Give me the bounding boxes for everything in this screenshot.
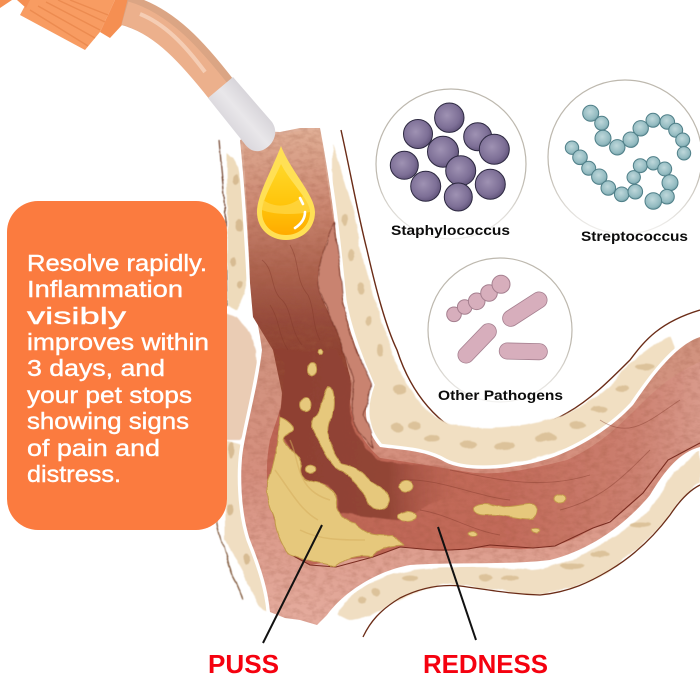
ring [548,80,700,234]
illustration: inflamed ear canal [217,128,700,637]
lower bone layer [338,450,700,637]
callout text: improves within [27,329,209,355]
dropper [0,0,275,151]
tissue dark lumen [274,350,470,520]
callout: puss [208,525,322,679]
dropper: silicone tip [208,77,275,151]
tissue wrinkle lines [262,245,680,535]
callout text: visibly [27,303,127,329]
rods [466,300,539,355]
dropper: cap [0,0,135,50]
panel: streptococcus [548,80,700,244]
pus deposits [267,349,566,567]
ring [428,258,572,402]
pus: main deposit [267,417,403,567]
spheres [390,103,509,211]
pus: droplets [300,398,311,412]
cocci chain [447,275,510,322]
callout: redness [423,527,548,679]
panel: orange callout [7,201,227,530]
tissue white halo [240,128,700,625]
callout text [27,250,209,487]
label: Streptococcus [581,228,688,244]
beads [565,105,691,209]
callout text: 3 days, and [27,355,165,381]
callout: puss: PUSS [208,649,279,679]
panel: other pathogens [428,258,572,403]
label: Other Pathogens [438,387,563,403]
panel: staphylococcus [376,89,526,239]
tissue inner edge [288,443,700,567]
tissue upper canal [243,130,350,420]
pus: winding streak [312,387,390,510]
tissue mid layer [267,362,700,565]
icon: oil drop [257,146,315,240]
ring [376,89,526,239]
dropper: tube [125,10,222,92]
callout text: Resolve rapidly. [27,250,207,276]
left bone layer [217,140,270,612]
label: Staphylococcus [391,222,510,238]
right bone layer [333,130,700,475]
callout: redness: REDNESS [423,649,548,679]
callout text: distress. [27,461,121,487]
pus: elongated deposit [474,504,538,519]
callout text: of pain and [27,435,160,461]
pus texture [275,440,365,540]
tissue outer wall [240,128,700,625]
callout text: showing signs [27,408,189,434]
callout text: your pet stops [27,382,192,408]
callout text: Inflammation [27,276,183,302]
tissue right fold [318,222,372,448]
